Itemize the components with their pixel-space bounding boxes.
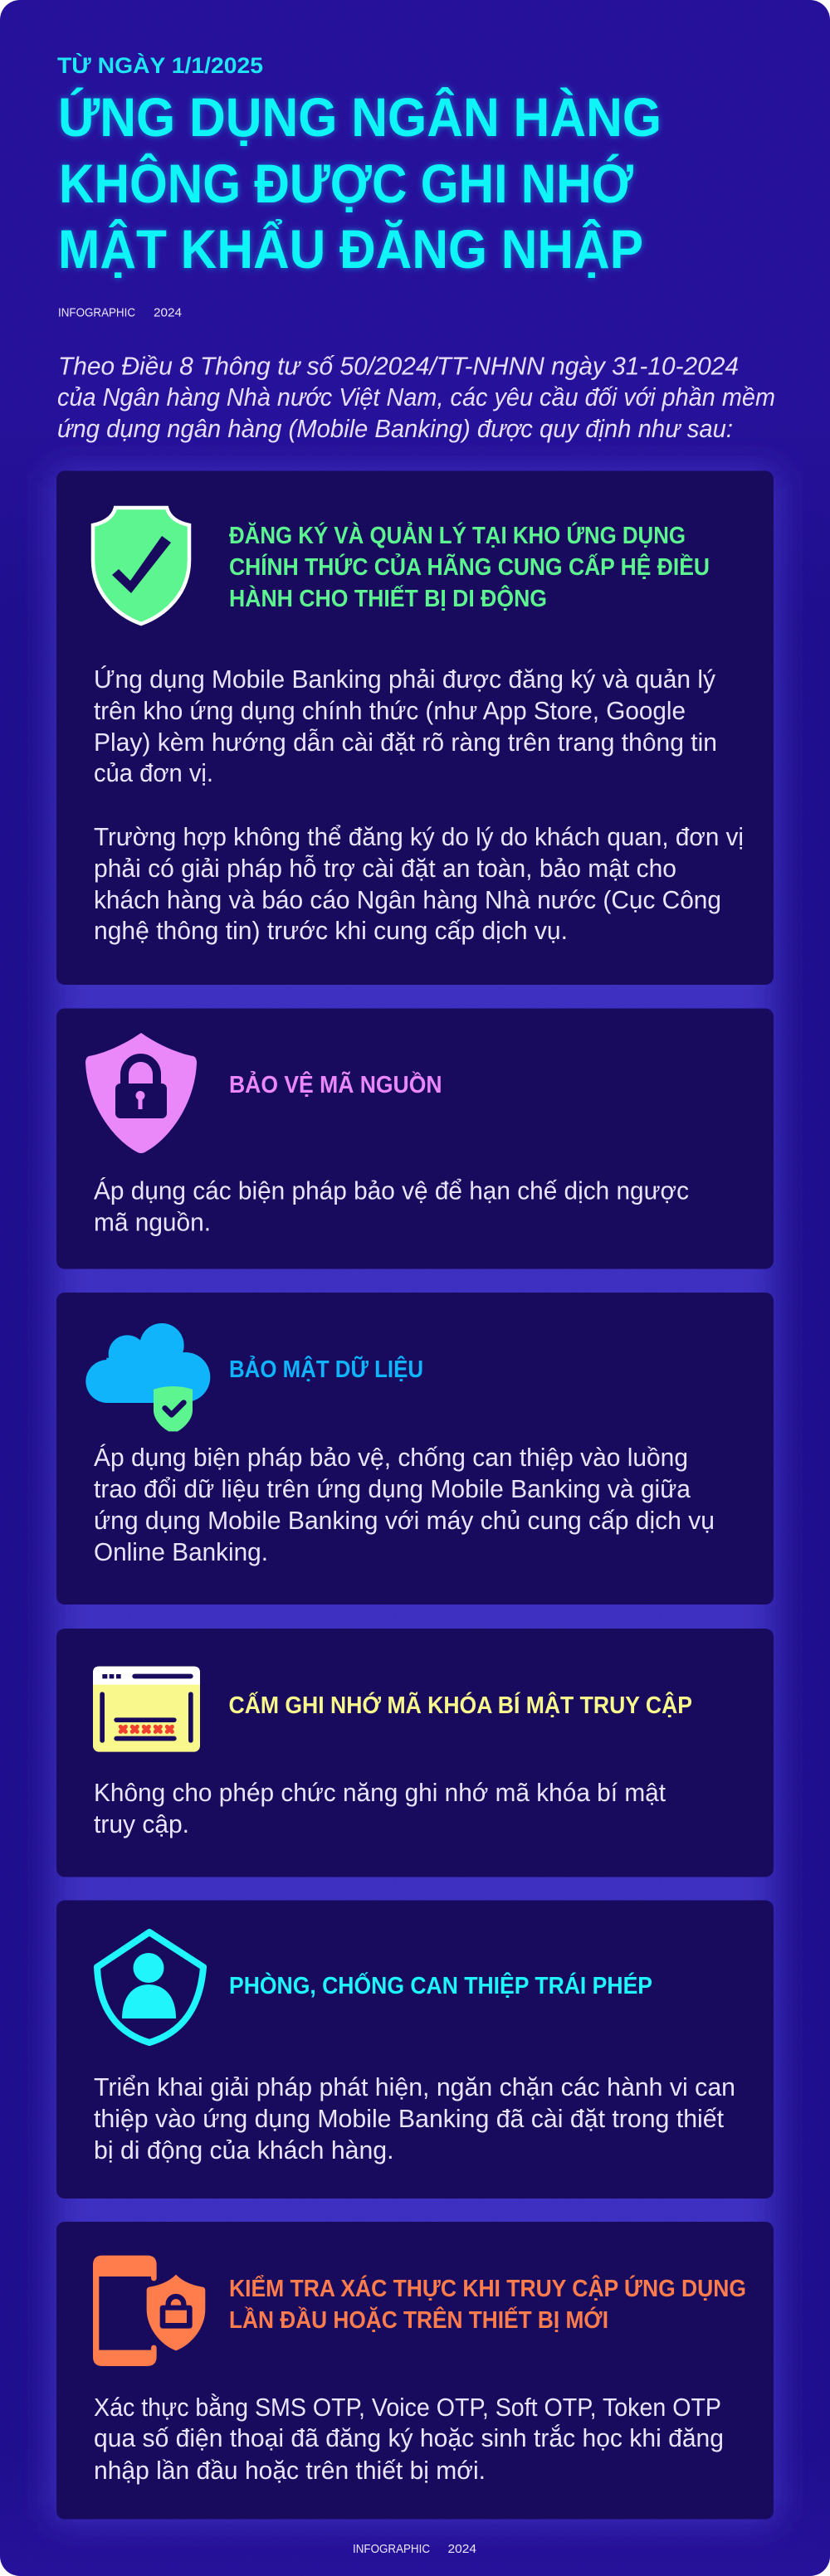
heading: KIỂM TRA XÁC THỰC KHI TRUY CẬP ỨNG DỤNG bbox=[229, 2276, 746, 2302]
body text: Trường hợp không thể đăng ký do lý do khách quan, đơn vị bbox=[94, 823, 744, 851]
body text: khách hàng và báo cáo Ngân hàng Nhà nước (Cục Công bbox=[94, 886, 721, 914]
body text: Ứng dụng Mobile Banking phải được đăng ký và quản lý bbox=[94, 665, 716, 694]
panel: app store registration bbox=[56, 471, 774, 985]
title: MẬT KHẨU ĐĂNG NHẬP bbox=[58, 219, 643, 280]
body text: trên kho ứng dụng chính thức (như App Store, Google bbox=[94, 697, 686, 725]
heading: BẢO MẬT DỮ LIỆU bbox=[229, 1356, 423, 1383]
heading: HÀNH CHO THIẾT BỊ DI ĐỘNG bbox=[229, 585, 547, 612]
title: KHÔNG ĐƯỢC GHI NHỚ bbox=[59, 153, 633, 214]
body text bbox=[94, 665, 744, 945]
body text bbox=[94, 2073, 735, 2165]
body text: bị di động của khách hàng. bbox=[94, 2136, 393, 2165]
icon: person shield bbox=[97, 1932, 203, 2043]
body text: Triển khai giải pháp phát hiện, ngăn chặn các hành vi can bbox=[94, 2073, 735, 2101]
heading: PHÒNG, CHỐNG CAN THIỆP TRÁI PHÉP bbox=[229, 1972, 652, 1999]
byline bbox=[58, 305, 182, 320]
heading: LẦN ĐẦU HOẶC TRÊN THIẾT BỊ MỚI bbox=[229, 2307, 608, 2334]
icon: cloud with shield bbox=[85, 1323, 210, 1431]
footer byline bbox=[353, 2542, 476, 2556]
title: KHÔNG ĐƯỢC GHI NHỚ bbox=[59, 153, 633, 214]
body text bbox=[94, 1443, 715, 1566]
body text: của đơn vị. bbox=[94, 759, 213, 787]
heading: ĐĂNG KÝ VÀ QUẢN LÝ TẠI KHO ỨNG DỤNG bbox=[229, 522, 686, 549]
title: ỨNG DỤNG NGÂN HÀNG bbox=[58, 87, 662, 148]
heading: CẤM GHI NHỚ MÃ KHÓA BÍ MẬT TRUY CẬP bbox=[229, 1692, 692, 1719]
body text: phải có giải pháp hỗ trợ cài đặt an toàn, bảo mật cho bbox=[94, 854, 676, 883]
icon: green check shield bbox=[93, 508, 189, 624]
heading: CHÍNH THỨC CỦA HÃNG CUNG CẤP HỆ ĐIỀU bbox=[229, 553, 710, 581]
panel: no password remember bbox=[56, 1629, 774, 1877]
icon: pink lock shield bbox=[85, 1033, 197, 1153]
body text: Áp dụng các biện pháp bảo vệ để hạn chế dịch ngược bbox=[94, 1176, 689, 1205]
byline: 2024 bbox=[154, 305, 182, 320]
panel: anti tampering bbox=[56, 1900, 774, 2199]
heading bbox=[229, 522, 710, 612]
icon: browser login window bbox=[93, 1667, 200, 1752]
heading bbox=[229, 2276, 746, 2334]
body text: trao đổi dữ liệu trên ứng dụng Mobile Banking và giữa bbox=[94, 1475, 691, 1503]
body text: Online Banking. bbox=[94, 1538, 268, 1566]
body text bbox=[94, 2393, 724, 2485]
title bbox=[58, 87, 662, 280]
body text: Xác thực bằng SMS OTP, Voice OTP, Soft OTP, Token OTP bbox=[94, 2393, 721, 2422]
panel: source code protection bbox=[56, 1009, 774, 1269]
eyebrow: date: TỪ NGÀY 1/1/2025 bbox=[57, 53, 263, 78]
intro paragraph: của Ngân hàng Nhà nước Việt Nam, các yêu cầu đối với phần mềm bbox=[57, 383, 775, 411]
body text: Play) kèm hướng dẫn cài đặt rõ ràng trên trang thông tin bbox=[94, 728, 717, 757]
icon: phone with lock shield bbox=[93, 2256, 205, 2366]
heading: BẢO VỆ MÃ NGUỒN bbox=[229, 1071, 442, 1098]
intro paragraph: Theo Điều 8 Thông tư số 50/2024/TT-NHNN ngày 31-10-2024 bbox=[58, 352, 739, 380]
body text bbox=[94, 1779, 666, 1838]
intro paragraph bbox=[57, 352, 775, 443]
body text: ứng dụng Mobile Banking với máy chủ cung cấp dịch vụ bbox=[94, 1507, 715, 1535]
body text: nghệ thông tin) trước khi cung cấp dịch vụ. bbox=[94, 917, 568, 945]
panel: first login verification bbox=[56, 2222, 774, 2519]
footer byline: INFOGRAPHIC bbox=[353, 2542, 430, 2556]
panel: data security bbox=[56, 1293, 774, 1605]
body text: Áp dụng biện pháp bảo vệ, chống can thiệp vào luồng bbox=[94, 1443, 688, 1472]
body text: qua số điện thoại đã đăng ký hoặc sinh trắc học khi đăng bbox=[94, 2423, 724, 2452]
title: MẬT KHẨU ĐĂNG NHẬP bbox=[58, 219, 643, 280]
title: ỨNG DỤNG NGÂN HÀNG bbox=[58, 87, 662, 148]
body text: truy cập. bbox=[94, 1810, 189, 1838]
intro paragraph: ứng dụng ngân hàng (Mobile Banking) được quy định như sau: bbox=[57, 415, 733, 443]
body text: Không cho phép chức năng ghi nhớ mã khóa bí mật bbox=[94, 1779, 666, 1807]
byline: INFOGRAPHIC bbox=[58, 305, 135, 320]
body text: thiệp vào ứng dụng Mobile Banking đã cài đặt trong thiết bbox=[94, 2105, 725, 2133]
body text: mã nguồn. bbox=[94, 1208, 211, 1236]
footer byline: 2024 bbox=[448, 2542, 476, 2556]
body text: nhập lần đầu hoặc trên thiết bị mới. bbox=[94, 2457, 486, 2485]
body text bbox=[94, 1176, 689, 1236]
